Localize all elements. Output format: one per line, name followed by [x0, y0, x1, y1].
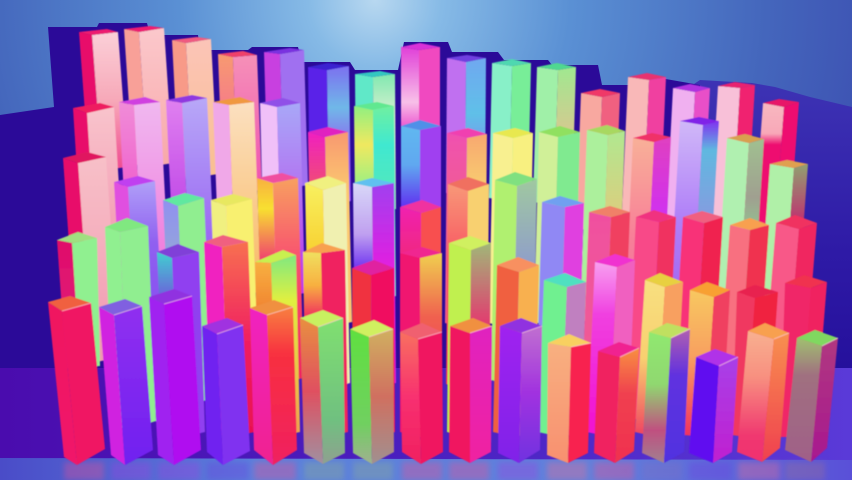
bar r3-12 [581, 206, 630, 417]
bar r1-4 [218, 51, 262, 192]
bar r1-16 [753, 99, 799, 242]
back wall [0, 0, 852, 368]
bar r1-1 [79, 29, 128, 170]
bar r1-3 [172, 37, 218, 178]
bar r1-6 [308, 63, 351, 205]
bar r1-9 [446, 55, 486, 197]
bar r5-14 [689, 349, 738, 463]
floor reflections [64, 462, 825, 480]
right wall shadow [640, 80, 852, 368]
bar r2-11 [534, 126, 580, 327]
bar r5-5 [250, 300, 297, 465]
bar r4-9 [447, 236, 491, 437]
bar r4-3 [157, 244, 205, 438]
bar r5-7 [350, 320, 394, 464]
bar r2-16 [756, 160, 808, 358]
bar r4-11 [538, 273, 586, 437]
bar r3-11 [536, 196, 584, 407]
bar r5-4 [202, 318, 250, 465]
floor [0, 368, 852, 468]
bar r3-13 [626, 210, 676, 422]
bar r4-2 [105, 218, 156, 430]
bar r1-13 [622, 73, 666, 215]
bar r3-2 [114, 176, 166, 387]
bar r2-14 [669, 117, 719, 315]
bar r3-4 [211, 194, 260, 406]
bar r3-7 [353, 178, 396, 387]
bar r3-8 [400, 200, 441, 413]
bar r2-15 [715, 134, 764, 333]
bar r2-9 [445, 128, 487, 328]
bar r2-6 [308, 127, 352, 327]
bar r1-8 [401, 43, 440, 185]
bar r1-15 [710, 82, 755, 223]
row 3 [63, 152, 817, 430]
bar r3-6 [305, 176, 350, 390]
bar r5-9 [449, 318, 492, 463]
bar r2-3 [166, 95, 216, 293]
bar r3-3 [163, 193, 213, 406]
row 1 [79, 26, 799, 242]
foreground floor [0, 458, 852, 480]
bar r5-3 [149, 289, 201, 465]
row 4 [57, 218, 827, 438]
bar r3-5 [257, 173, 304, 383]
bar r3-1 [63, 152, 120, 363]
bar r4-12 [587, 254, 635, 437]
bar r5-16 [785, 330, 838, 462]
bar r2-4 [213, 97, 261, 295]
bar r3-10 [491, 172, 537, 386]
bar r5-13 [642, 323, 690, 463]
bar r4-4 [204, 235, 255, 437]
bar r4-13 [635, 273, 683, 437]
bar r5-1 [48, 296, 105, 465]
bar r5-6 [300, 310, 345, 464]
bar r2-5 [260, 98, 305, 297]
bar r2-8 [401, 120, 441, 320]
row 2 [73, 95, 808, 358]
bar r3-9 [446, 177, 489, 391]
bar r4-7 [352, 260, 395, 437]
bar r4-15 [732, 285, 778, 437]
bar r2-2 [119, 97, 170, 295]
bar r5-8 [400, 323, 443, 464]
bar r1-7 [355, 71, 396, 212]
bar r2-7 [354, 102, 396, 300]
bar r2-1 [73, 103, 126, 303]
bar r5-2 [99, 299, 153, 465]
bar r1-14 [666, 84, 710, 227]
bar r3-14 [671, 211, 723, 423]
bar r4-10 [493, 257, 539, 437]
bar r4-1 [57, 232, 100, 368]
bar r4-16 [780, 275, 827, 437]
bar r5-10 [498, 318, 542, 463]
bar r2-13 [624, 133, 671, 332]
bar r3-16 [760, 215, 817, 429]
bar r4-5 [255, 250, 300, 437]
bar r2-10 [489, 128, 533, 328]
bar r1-11 [533, 63, 576, 205]
bar r1-12 [576, 89, 620, 232]
bar r1-2 [124, 26, 173, 167]
bar r5-11 [547, 334, 591, 463]
bar r2-12 [580, 125, 625, 325]
left wall shadow [0, 23, 700, 368]
bar r5-15 [737, 323, 789, 462]
bar r4-6 [303, 243, 348, 437]
bar r1-10 [489, 59, 531, 201]
bar r3-15 [716, 218, 769, 430]
bar r1-5 [264, 48, 308, 189]
bar r5-12 [594, 342, 639, 463]
row 5 front [48, 289, 838, 465]
bar r4-8 [400, 247, 442, 437]
front row edge highlights [62, 296, 838, 366]
bar r4-14 [684, 282, 730, 437]
